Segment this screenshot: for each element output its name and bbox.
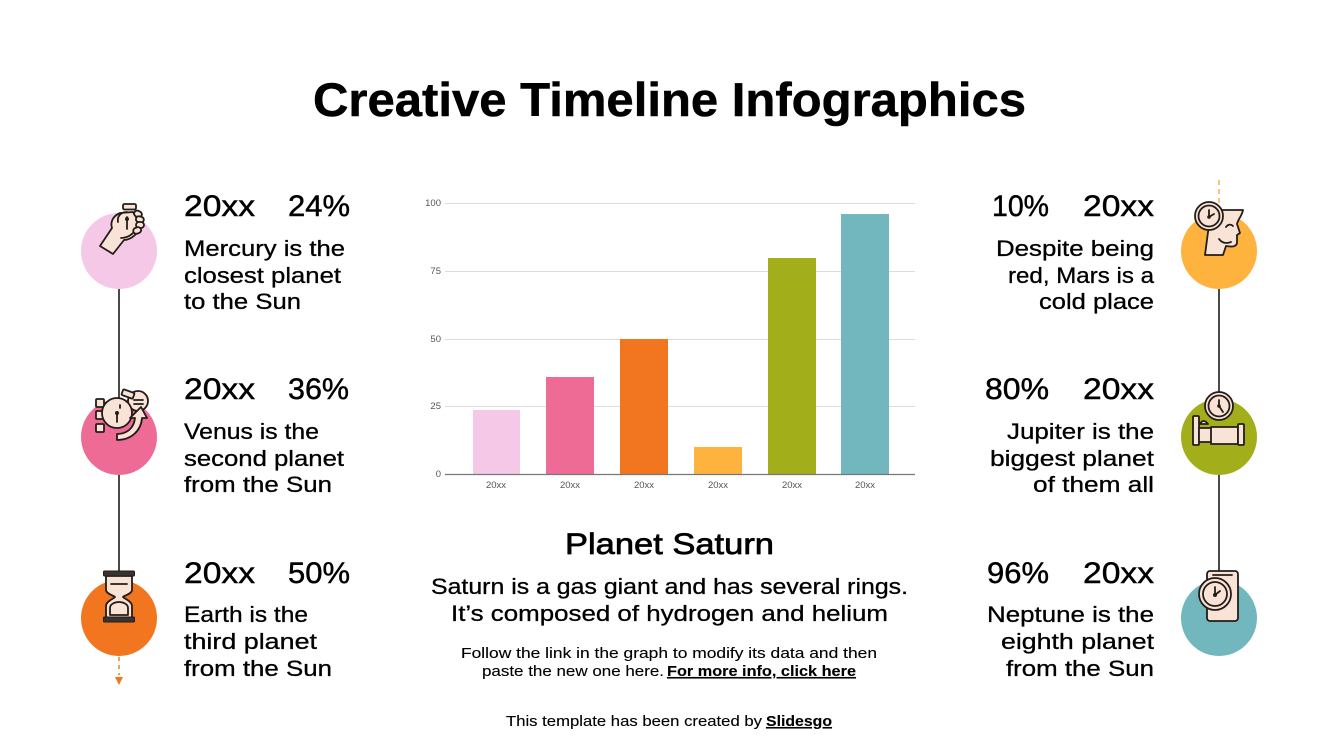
left text: mercury: 20xx (184, 190, 255, 223)
right text: mars: Despite being (996, 236, 1154, 261)
icon: head with clock (1195, 202, 1243, 255)
left text: earth: Earth is the (184, 602, 308, 627)
left text: earth: 20xx (184, 557, 255, 590)
text block: follow the link: Follow the link in the graph to modify its data and then (461, 645, 877, 662)
bar: 36 (546, 377, 594, 474)
y axis labels: 25 (430, 401, 441, 412)
y axis labels (425, 198, 441, 480)
node: earth circle (81, 580, 157, 656)
left text: venus: from the Sun (184, 472, 332, 497)
icon: bed with clock (1193, 392, 1244, 445)
right text: jupiter (985, 373, 1155, 497)
right text: jupiter: Jupiter is the (1007, 419, 1154, 444)
left text: mercury: closest planet (184, 263, 342, 288)
left text: earth: third planet (184, 629, 318, 654)
text block: saturn description: Saturn is a gas giant and has several rings. (431, 574, 908, 599)
left timeline (81, 204, 157, 685)
right text: neptune: from the Sun (1006, 656, 1154, 681)
left text: venus: second planet (184, 446, 345, 471)
text block: follow the link: paste the new one here. (482, 663, 664, 680)
node: mars circle (1181, 213, 1257, 289)
right text: mars (992, 190, 1155, 314)
y axis labels: 50 (430, 334, 441, 345)
left text: earth (184, 557, 350, 681)
x axis labels (486, 480, 875, 491)
heading: planet saturn: Planet Saturn (565, 528, 774, 561)
icon: clock with checklist and arrow (96, 389, 148, 440)
left text: mercury: Mercury is the (184, 236, 345, 261)
node: mercury circle (81, 213, 157, 289)
right text: jupiter: of them all (1033, 472, 1154, 497)
node: neptune circle (1181, 580, 1257, 656)
text block: follow the link: For more info, click here (667, 663, 856, 680)
right text: mars: 10% (992, 190, 1049, 223)
left text: venus (184, 373, 349, 497)
left text: venus: 36% (288, 373, 349, 406)
text block: saturn description: It’s composed of hydrogen and helium (451, 601, 888, 626)
icon: hand holding stopwatch (100, 204, 145, 254)
footer credit: This template has been created by (506, 713, 763, 730)
right text: jupiter: biggest planet (990, 446, 1155, 471)
x axis labels: 20xx (708, 480, 728, 491)
right text: mars: 20xx (1083, 190, 1154, 223)
left text: venus: Venus is the (184, 419, 319, 444)
bar: 10 (694, 447, 742, 474)
node: jupiter circle (1181, 399, 1257, 475)
bar: 50 (620, 339, 668, 474)
left text: earth: from the Sun (184, 656, 332, 681)
text block: follow the link (461, 645, 877, 680)
right timeline (1181, 180, 1257, 656)
right text: neptune (987, 557, 1155, 681)
title: Creative Timeline Infographics (313, 73, 1026, 126)
icon: hourglass (104, 571, 134, 622)
right text: jupiter: 80% (985, 373, 1049, 406)
bar: 24 (473, 410, 520, 474)
bar: 96 (841, 214, 889, 474)
node: venus circle (81, 399, 157, 475)
right text: jupiter: 20xx (1083, 373, 1154, 406)
y axis labels: 75 (430, 266, 441, 277)
icon: phone with clock (1199, 571, 1238, 621)
y axis labels: 100 (425, 198, 441, 209)
left text: mercury: to the Sun (184, 289, 301, 314)
x axis labels: 20xx (560, 480, 580, 491)
right text: neptune: Neptune is the (987, 602, 1154, 627)
left text: earth: 50% (288, 557, 350, 590)
right text: neptune: 96% (987, 557, 1049, 590)
right text: mars: cold place (1039, 289, 1154, 314)
x axis labels: 20xx (634, 480, 654, 491)
left text: mercury (184, 190, 350, 314)
y axis labels: 0 (436, 469, 441, 480)
x axis labels: 20xx (782, 480, 802, 491)
right text: neptune: eighth planet (1001, 629, 1155, 654)
text block: saturn description (431, 574, 908, 626)
bar: 80 (768, 258, 816, 474)
left text: mercury: 24% (288, 190, 350, 223)
bar chart (425, 198, 915, 491)
x axis labels: 20xx (855, 480, 875, 491)
right text: mars: red, Mars is a (1008, 263, 1155, 288)
footer credit: Slidesgo (766, 713, 832, 730)
right text: neptune: 20xx (1083, 557, 1154, 590)
left text: venus: 20xx (184, 373, 255, 406)
x axis labels: 20xx (486, 480, 506, 491)
dashed arrow: down (115, 657, 123, 685)
